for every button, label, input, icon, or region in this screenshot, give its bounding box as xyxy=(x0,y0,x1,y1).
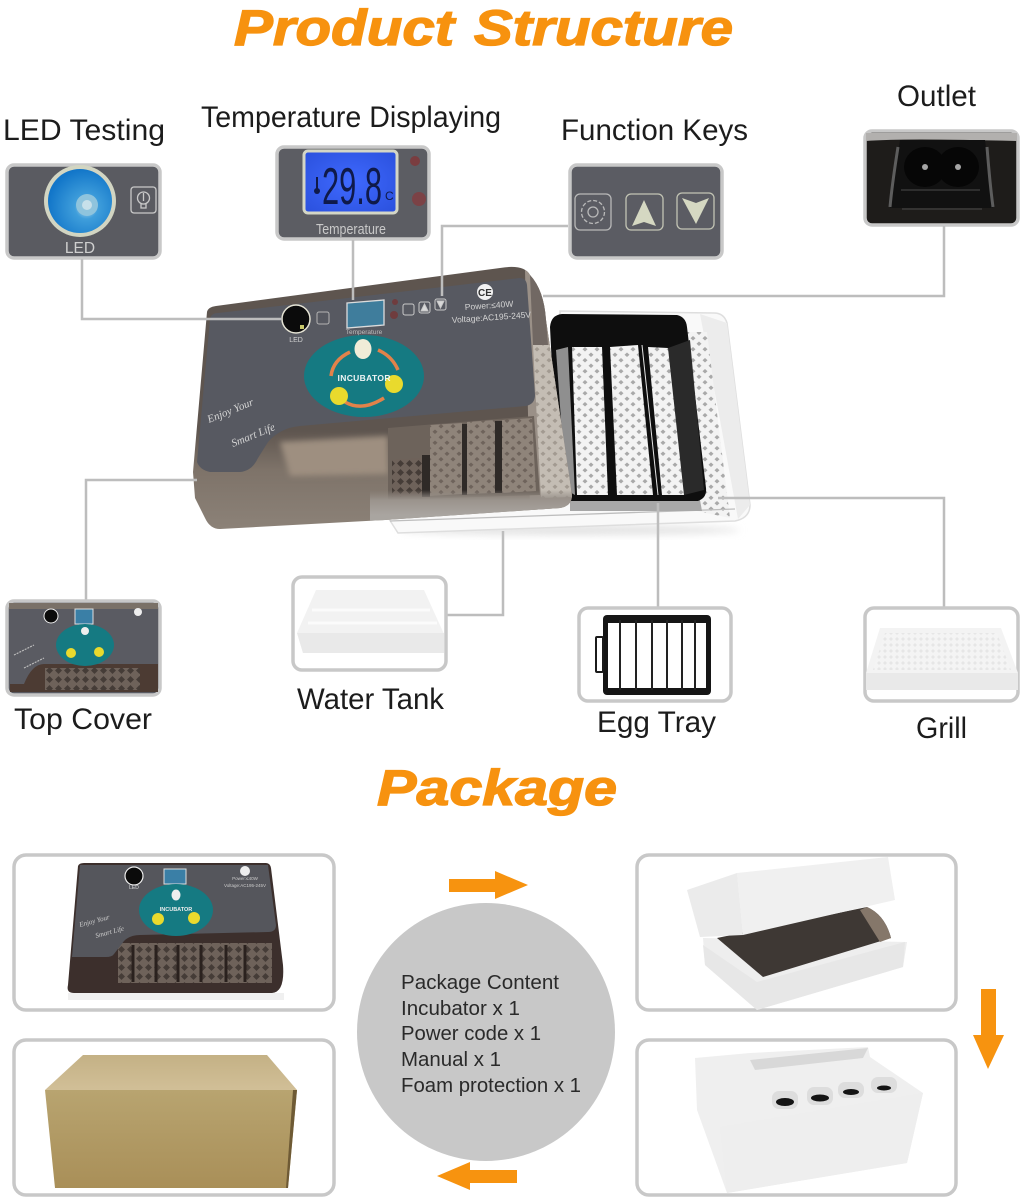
display: Temperature xyxy=(346,329,383,336)
icon: bulb xyxy=(131,187,156,213)
icon: down key xyxy=(677,193,714,229)
ce mark and spec: Power:≤40W xyxy=(464,299,514,312)
panel: packaged incubator: Smart Life xyxy=(94,925,125,940)
panel: top cover thumbnail xyxy=(7,601,160,695)
display xyxy=(346,300,384,336)
title: Product Structure: Product Structure xyxy=(234,0,733,56)
label: Temperature Displaying: Temperature Displaying xyxy=(201,101,501,134)
lcd screen: C xyxy=(385,189,394,203)
lid interior see-through xyxy=(280,270,575,525)
connector lines xyxy=(82,226,944,615)
transparent lid xyxy=(193,267,575,529)
text block: package list: Foam protection x 1 xyxy=(401,1074,581,1097)
control panel xyxy=(197,278,535,472)
panel: packaged incubator: LED xyxy=(129,885,139,891)
arrow: down xyxy=(973,989,1004,1069)
panel: packaged incubator: Voltage:AC195-245V xyxy=(224,883,266,888)
outer water tray and grill xyxy=(389,311,750,535)
text block: package list: Package Content xyxy=(401,971,559,994)
panel: LED detail: LED xyxy=(65,240,95,257)
socket xyxy=(904,147,979,187)
panel: foam package opening xyxy=(637,855,956,1010)
keys xyxy=(403,299,446,315)
LED button: LED xyxy=(289,337,303,344)
label: Egg Tray: Egg Tray xyxy=(597,706,716,739)
egg tray xyxy=(550,314,706,511)
label: Grill: Grill xyxy=(916,712,967,745)
panel: water tank thumbnail xyxy=(293,577,446,670)
text block: package list: Manual x 1 xyxy=(401,1048,501,1071)
panel: temperature display detail xyxy=(277,147,429,239)
panel: foam package closed xyxy=(637,1040,956,1195)
panel: packaged incubator: Enjoy Your xyxy=(77,913,111,929)
circle: package content xyxy=(357,903,615,1161)
lcd screen: 29.8 xyxy=(322,158,382,216)
arrow: right xyxy=(449,871,528,899)
panel: egg tray thumbnail xyxy=(579,608,731,701)
panel: temperature display detail: Temperature xyxy=(316,222,386,238)
text block: package list xyxy=(401,971,581,1097)
label: Top Cover: Top Cover xyxy=(14,703,152,736)
panel: packaged incubator: Temperature xyxy=(162,886,188,891)
label: LED Testing: LED Testing xyxy=(3,114,165,147)
title: Package: Package xyxy=(377,760,617,816)
label: Outlet: Outlet xyxy=(897,80,977,113)
label: Function Keys: Function Keys xyxy=(561,114,748,147)
ce mark and spec xyxy=(451,284,532,325)
panel: cardboard box xyxy=(14,1040,334,1195)
panel: function keys detail xyxy=(570,165,722,258)
ce mark and spec: CE xyxy=(478,288,492,299)
panel: outlet detail xyxy=(865,131,1018,225)
ce mark and spec: Voltage:AC195-245V xyxy=(451,309,532,325)
panel: packaged incubator xyxy=(14,855,334,1010)
incubator logo xyxy=(304,335,424,417)
incubator logo: INCUBATOR xyxy=(338,373,390,383)
slogan: Enjoy Your xyxy=(205,396,256,426)
panel: packaged incubator: Power:≤40W xyxy=(232,876,259,881)
lcd screen xyxy=(304,151,397,216)
icon: up key xyxy=(626,194,663,230)
illustration: incubator main product xyxy=(193,267,750,535)
text block: package list: Power code x 1 xyxy=(401,1022,541,1045)
icon: LED light xyxy=(44,165,116,237)
panel: packaged incubator: INCUBATOR xyxy=(160,907,192,913)
panel: grill thumbnail xyxy=(865,608,1018,701)
LED button xyxy=(282,305,329,344)
air holes xyxy=(772,1077,897,1109)
slogan: Smart Life xyxy=(230,421,277,450)
icon: settings gear xyxy=(575,194,611,230)
text block: package list: Incubator x 1 xyxy=(401,997,520,1020)
label: Water Tank: Water Tank xyxy=(297,683,445,716)
arrow: left xyxy=(437,1162,517,1190)
slogan xyxy=(205,396,277,450)
panel: LED detail xyxy=(7,165,160,258)
